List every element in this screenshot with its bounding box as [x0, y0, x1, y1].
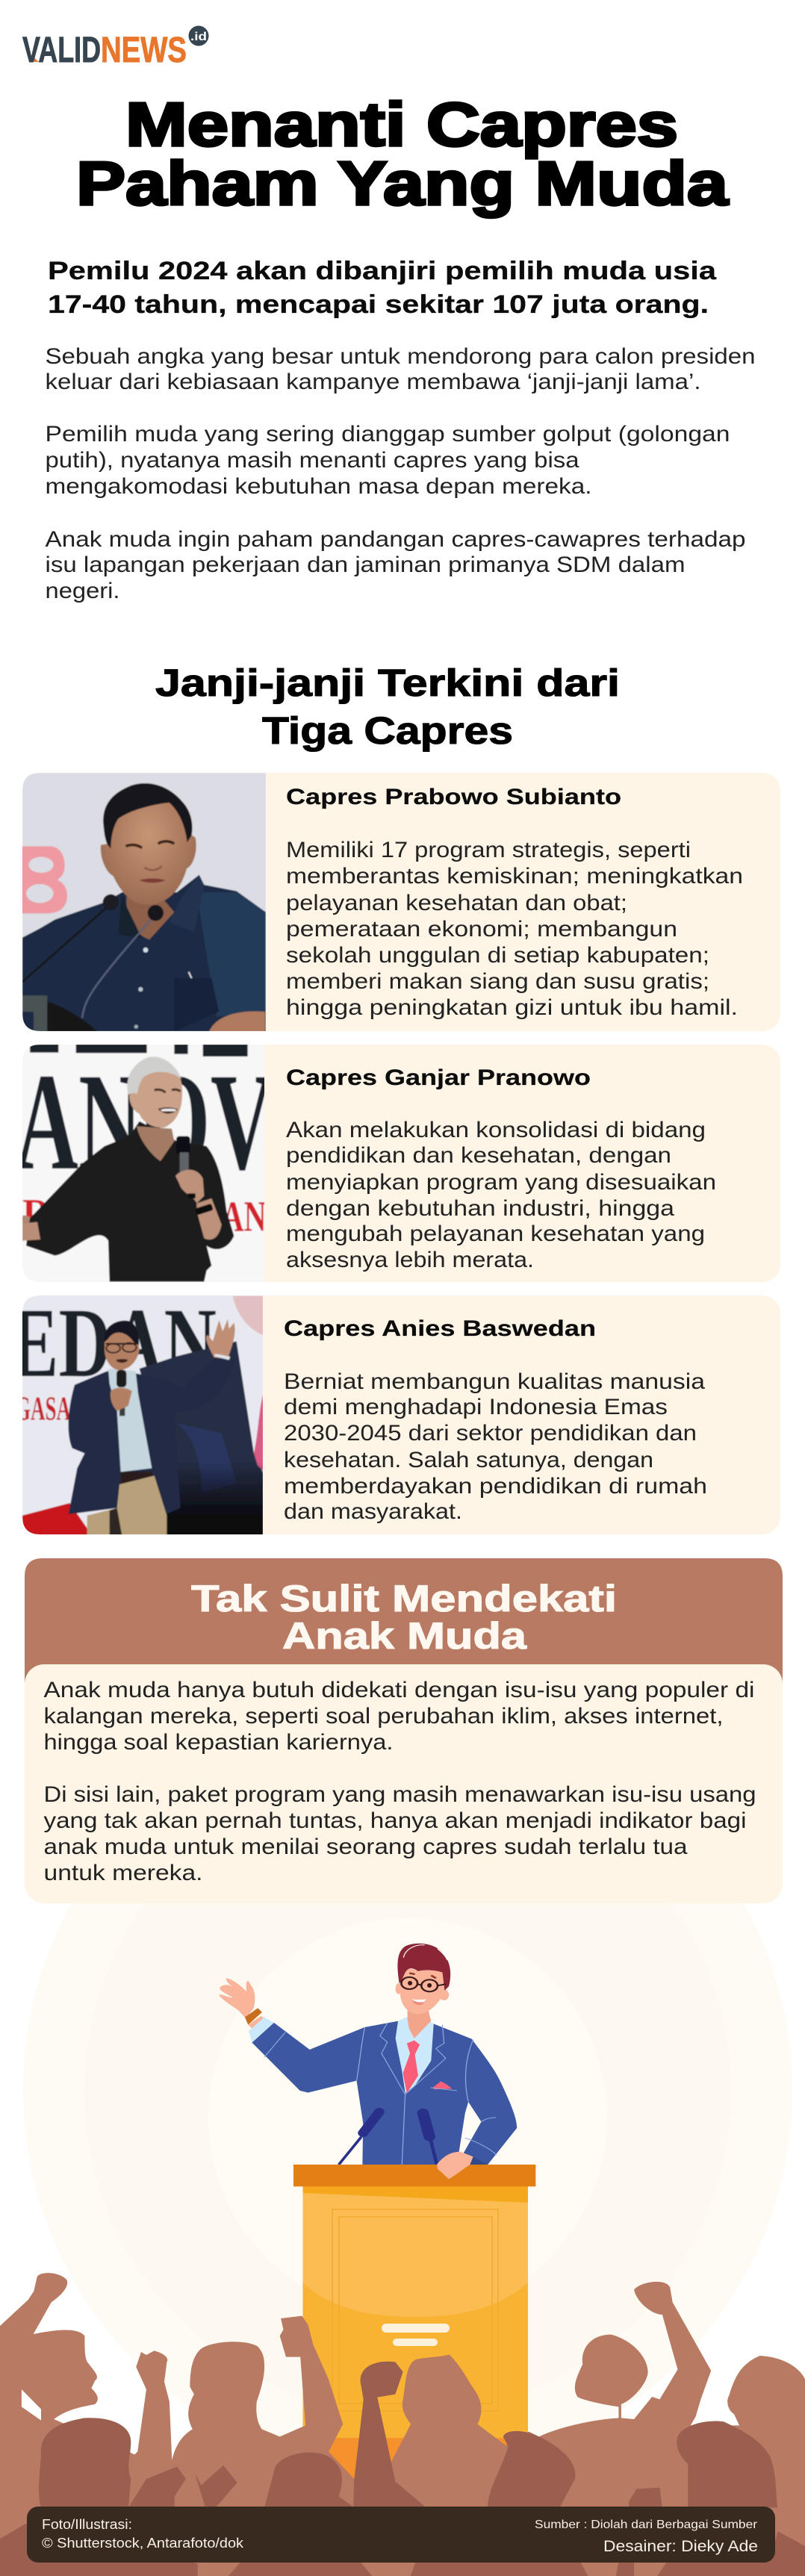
photo: Ganjar: RAG — [22, 1190, 108, 1241]
face — [400, 1969, 446, 2014]
text block: Tak Sulit: untuk mereka. — [43, 1861, 203, 1885]
heading: Janji-janji Terkini dari Tiga Capres: Janji-janji Terkini dari — [155, 662, 620, 704]
photo: Ganjar — [15, 1042, 274, 1286]
credit: photo: © Shutterstock, Antarafoto/dok — [42, 2536, 244, 2551]
intro text block: Anak muda ingin paham pandangan capres-cawapres terhadap — [45, 527, 745, 552]
gap between arm and head — [22, 2389, 41, 2421]
crowd back row — [0, 2273, 805, 2576]
description: Prabowo: hingga peningkatan gizi untuk ibu hamil. — [286, 995, 738, 1020]
subtitle: lead statement: 17-40 tahun, mencapai sekitar 107 juta orang. — [48, 290, 709, 319]
credit: source and designer: Sumber : Diolah dari Berbagai Sumber — [535, 2519, 758, 2531]
hand raised — [219, 1978, 255, 2018]
intro text block: mengakomodasi kebutuhan masa depan mereka. — [45, 474, 591, 499]
photo: Prabowo — [17, 773, 267, 1032]
name: Prabowo: Capres Prabowo Subianto — [286, 785, 621, 809]
intro text block: negeri. — [45, 579, 119, 603]
credit: photo: Foto/Illustrasi: — [42, 2517, 132, 2532]
photo: Anies: EDAN — [10, 1287, 217, 1398]
panel: Ganjar — [15, 1042, 780, 1286]
mouth — [411, 1999, 426, 2005]
description: Prabowo: pemerataan ekonomi; membangun — [286, 917, 677, 942]
intro text block: Pemilih muda yang sering dianggap sumber golput (golongan — [45, 422, 730, 447]
description: Anies: 2030-2045 dari sektor pendidikan dan — [284, 1421, 697, 1446]
illustration: speaker — [219, 1944, 535, 2186]
hair — [397, 1944, 450, 1991]
photo: Ganjar: ANOV — [15, 1045, 274, 1199]
pocket square — [432, 2081, 452, 2089]
intro text block: keluar dari kebiasaan kampanye membawa ‘janji-janji lama’. — [45, 370, 700, 394]
name: Anies: Capres Anies Baswedan — [284, 1316, 596, 1341]
description: Ganjar: menyiapkan program yang disesuaikan — [286, 1170, 716, 1195]
heading: Tak Sulit Mendekati Anak Muda: Tak Sulit Mendekati — [191, 1578, 617, 1620]
intro text block: Sebuah angka yang besar untuk mendorong para calon presiden — [45, 344, 756, 369]
credit: source and designer — [535, 2519, 758, 2555]
panel: Prabowo — [17, 773, 780, 1032]
description: Ganjar: dengan kebutuhan industri, hingga — [286, 1196, 674, 1221]
suit — [252, 2021, 517, 2165]
text block: Tak Sulit — [43, 1678, 756, 1885]
text block: Tak Sulit: yang tak akan pernah tuntas, hanya akan menjadi indikator bagi — [43, 1808, 746, 1833]
description: Anies — [284, 1369, 707, 1524]
title — [76, 90, 729, 218]
hand on podium — [437, 2152, 473, 2179]
intro text block: isu lapangan pekerjaan dan jaminan primanya SDM dalam — [45, 553, 686, 577]
credit: photo — [42, 2517, 244, 2551]
panel: Anies — [10, 1287, 780, 1538]
description: Anies: kesehatan. Salah satunya, dengan — [284, 1448, 653, 1472]
heading: Tak Sulit Mendekati Anak Muda — [191, 1578, 617, 1657]
logo: Validnews.id: .id — [190, 31, 207, 43]
crowd front row — [0, 2362, 805, 2576]
footer bar — [27, 2507, 775, 2563]
description: Ganjar: mengubah pelayanan kesehatan yang — [286, 1222, 705, 1246]
photo: Anies: GASA — [15, 1390, 71, 1427]
description: Anies: memberdayakan pendidikan di rumah — [284, 1474, 707, 1499]
title: Paham Yang Muda — [76, 149, 729, 218]
intro text block — [45, 344, 756, 603]
photo: Ganjar: AN — [222, 1192, 267, 1240]
description: Ganjar: pendidikan dan kesehatan, dengan — [286, 1143, 671, 1168]
shirt — [396, 2017, 434, 2093]
subtitle: lead statement — [48, 257, 717, 319]
name: Ganjar: Capres Ganjar Pranowo — [286, 1065, 591, 1090]
panel: Tak Sulit Mendekati Anak Muda — [25, 1558, 783, 1903]
microphones — [363, 2112, 379, 2133]
description: Ganjar — [286, 1118, 716, 1272]
tie — [403, 2041, 420, 2093]
description: Ganjar: aksesnya lebih merata. — [286, 1248, 534, 1272]
description: Prabowo: memberantas kemiskinan; meningkatkan — [286, 864, 743, 889]
description: Prabowo: sekolah unggulan di setiap kabupaten; — [286, 943, 709, 968]
glasses — [401, 1977, 446, 1991]
neck — [408, 2010, 431, 2038]
description: Prabowo: pelayanan kesehatan dan obat; — [286, 891, 627, 915]
description: Anies: Berniat membangun kualitas manusia — [284, 1369, 705, 1394]
logo: Validnews.id: NEWS — [101, 31, 187, 70]
illustration: podium body — [303, 2186, 528, 2565]
intro text block: putih), nyatanya masih menanti capres yang bisa — [45, 448, 579, 473]
description: Prabowo: Memiliki 17 program strategis, seperti — [286, 838, 691, 862]
description: Anies: demi menghadapi Indonesia Emas — [284, 1395, 668, 1419]
description: Prabowo — [286, 838, 743, 1020]
illustration: crowd silhouettes — [0, 2273, 805, 2576]
text block: Tak Sulit: kalangan mereka, seperti soal perubahan iklim, akses internet, — [43, 1704, 723, 1729]
text block: Tak Sulit: hingga soal kepastian kariernya. — [43, 1730, 393, 1755]
logo: Validnews.id — [22, 25, 209, 70]
subtitle: lead statement: Pemilu 2024 akan dibanjiri pemilih muda usia — [48, 257, 717, 285]
text block: Tak Sulit: anak muda untuk menilai seorang capres sudah terlalu tua — [43, 1835, 688, 1859]
heading: Janji-janji Terkini dari Tiga Capres — [155, 662, 620, 752]
title: Menanti Capres — [125, 90, 678, 159]
text block: Tak Sulit: Di sisi lain, paket program yang masih menawarkan isu-isu usang — [43, 1782, 756, 1807]
background: pale sun circles — [23, 1767, 792, 2474]
photo: Anies — [22, 1295, 263, 1534]
heading: Janji-janji Terkini dari Tiga Capres: Tiga Capres — [262, 709, 513, 752]
description: Anies: dan masyarakat. — [284, 1499, 462, 1524]
podium top — [293, 2165, 535, 2186]
heading: Tak Sulit Mendekati Anak Muda: Anak Muda — [282, 1615, 527, 1657]
credit: source and designer: Desainer: Dieky Ade — [603, 2538, 758, 2555]
logo: Validnews.id: VALID — [22, 31, 101, 70]
description: Ganjar: Akan melakukan konsolidasi di bidang — [286, 1118, 706, 1142]
text block: Tak Sulit: Anak muda hanya butuh didekati dengan isu-isu yang populer di — [43, 1678, 755, 1702]
description: Prabowo: memberi makan siang dan susu gratis; — [286, 969, 709, 994]
